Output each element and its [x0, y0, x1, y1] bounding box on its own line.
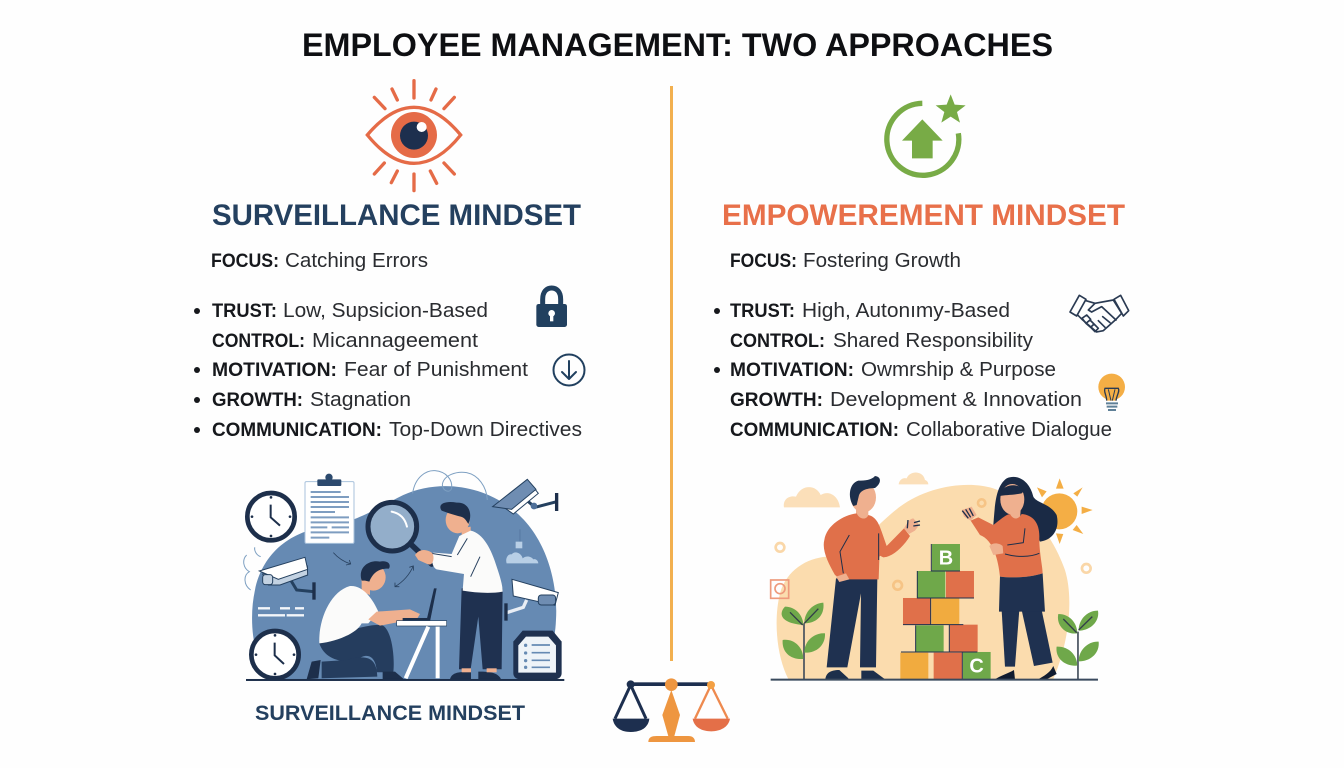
plant left [782, 603, 825, 679]
text: surveillance attributes: Catching Errors [285, 250, 428, 272]
text: empowerment attributes: MOTIVATION: [730, 359, 854, 381]
text: empowerment attributes: Shared Responsibility [833, 330, 1033, 352]
text: empowerment attributes: GROWTH: [730, 389, 823, 411]
icon: down arrow in circle [554, 354, 584, 386]
center divider line [670, 86, 673, 661]
decorative arcs and arrows [244, 471, 487, 590]
icon: lightbulb [1098, 374, 1125, 410]
text: surveillance attributes: TRUST: [212, 300, 277, 322]
clouds [784, 473, 928, 507]
block tower: C [969, 656, 984, 678]
camera top right [493, 479, 558, 514]
text: surveillance attributes: Top-Down Directives [389, 419, 582, 441]
caption: surveillance mindset: SURVEILLANCE MINDSET [255, 702, 525, 725]
ground line [246, 679, 564, 681]
illustration: surveillance scene [244, 471, 564, 681]
text: empowerment attributes: High, Autonımy-Based [802, 300, 1010, 322]
man [824, 476, 920, 679]
heading: surveillance mindset: SURVEILLANCE MINDSET [212, 199, 581, 232]
icon: clock top [247, 493, 295, 540]
sun [1037, 478, 1093, 544]
text: surveillance attributes: FOCUS: [211, 250, 279, 272]
small cloud and dashes [506, 552, 538, 563]
text: surveillance attributes: MOTIVATION: [212, 359, 337, 381]
text: surveillance attributes: Low, Supsicion-Based [283, 300, 488, 322]
text: surveillance attributes: GROWTH: [212, 389, 303, 411]
camera right [504, 579, 558, 621]
peach backdrop [777, 485, 1069, 679]
text: surveillance attributes: CONTROL: [212, 330, 305, 352]
person standing [415, 502, 503, 679]
text: empowerment attributes: Fostering Growth [803, 250, 961, 272]
icon: clock bottom [251, 631, 299, 678]
icon: checklist badge [513, 631, 562, 679]
block tower: B [939, 547, 953, 569]
text: surveillance attributes: COMMUNICATION: [212, 419, 382, 441]
icon: padlock [536, 288, 567, 327]
text: empowerment attributes: Owmrship & Purpose [861, 359, 1056, 381]
icon: growth arrow and star [887, 94, 966, 175]
text: surveillance attributes: Micannageement [312, 330, 478, 352]
text: empowerment attributes: Collaborative Dialogue [906, 419, 1112, 441]
text: empowerment attributes: COMMUNICATION: [730, 419, 899, 441]
camera left [259, 557, 316, 600]
clipboard [305, 474, 354, 543]
woman [962, 477, 1057, 679]
text: empowerment attributes: Development & Innovation [830, 389, 1082, 411]
icon: handshake [1070, 295, 1129, 332]
ground line [771, 679, 1098, 681]
panel: surveillance mindset [194, 81, 584, 725]
panel: empowerment mindset [714, 94, 1129, 681]
heading: empowerment mindset: EMPOWEREMENT MINDSET [722, 199, 1125, 232]
text: empowerment attributes [714, 250, 1112, 441]
text: surveillance attributes: Fear of Punishment [344, 359, 528, 381]
text: empowerment attributes: TRUST: [730, 300, 795, 322]
block tower [900, 544, 991, 679]
magnifying glass [368, 502, 432, 564]
decorative rings and square [776, 499, 1091, 590]
text: empowerment attributes: FOCUS: [730, 250, 797, 272]
laptop and desk [397, 588, 447, 678]
title: EMPLOYEE MANAGEMENT: TWO APPROACHES [302, 27, 1053, 63]
text: surveillance attributes: Stagnation [310, 389, 411, 411]
illustration: empowerment scene [771, 473, 1099, 681]
icon: balance scale [613, 678, 730, 742]
text: surveillance attributes [194, 250, 582, 441]
text: empowerment attributes: CONTROL: [730, 330, 825, 352]
person kneeling [307, 561, 420, 679]
plant right [1056, 611, 1099, 679]
blue backdrop [252, 486, 556, 679]
icon: eye [367, 81, 461, 191]
